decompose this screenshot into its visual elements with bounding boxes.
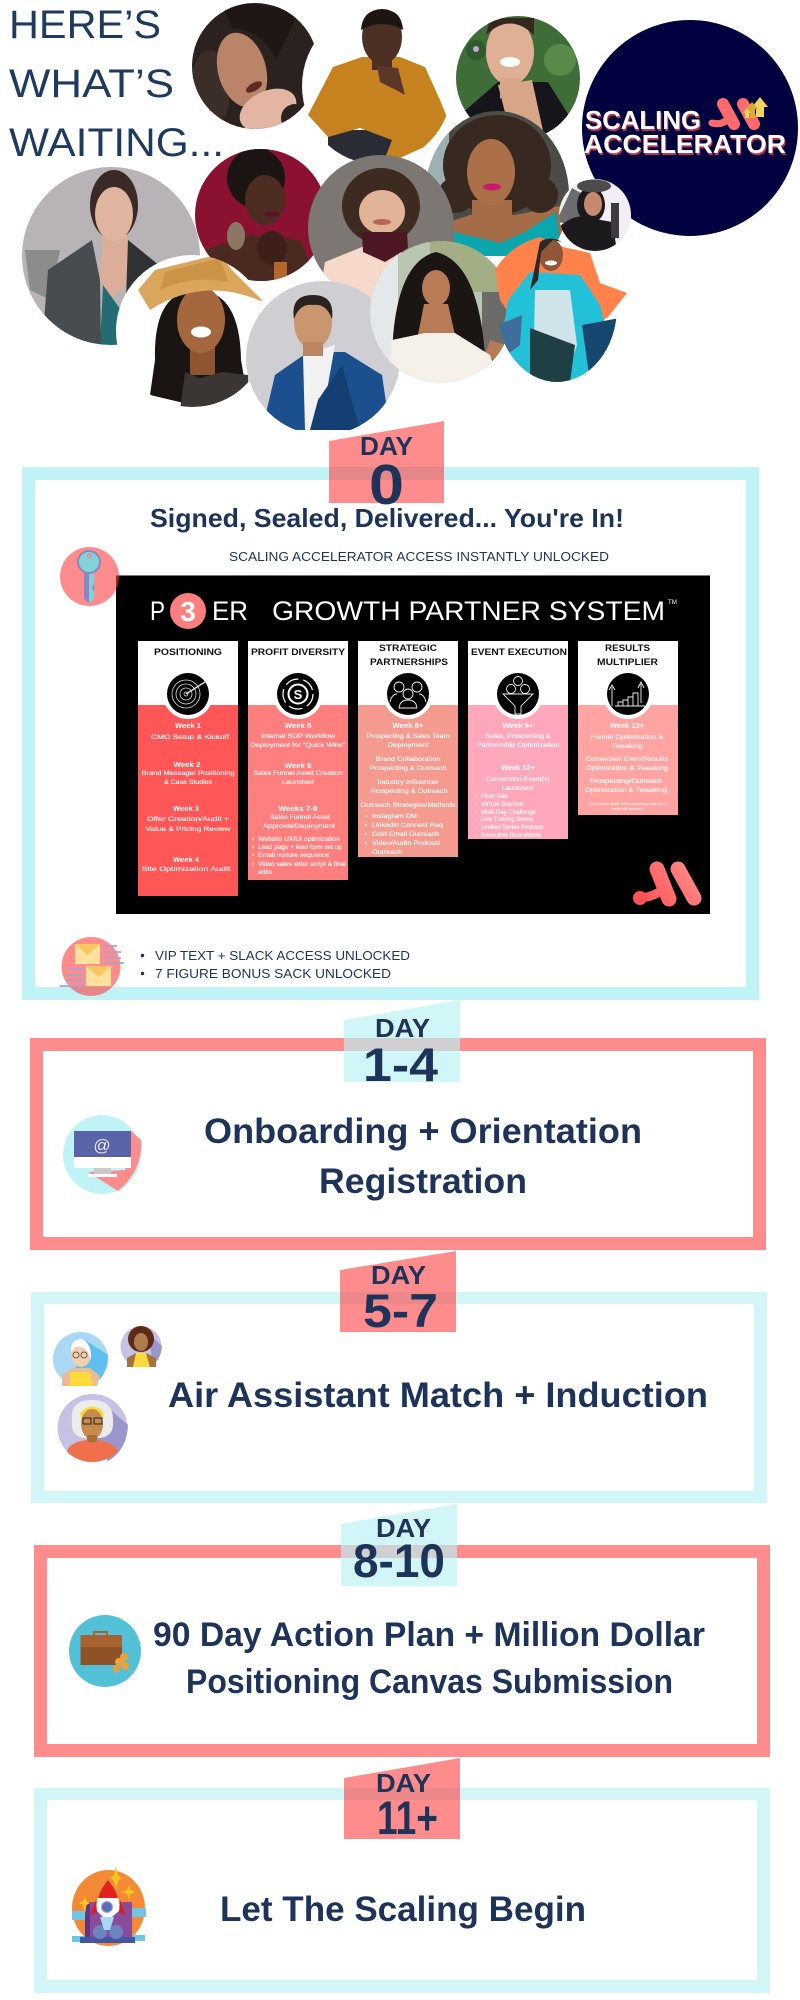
column: event execution: Week 9+: [502, 723, 534, 730]
column: event execution: Sales, Prospecting &: [486, 733, 551, 740]
column: event execution: Executive Roundtable: [481, 832, 542, 839]
column: results multiplier: RESULTS: [605, 642, 650, 653]
column: results multiplier: *we provide daily team reporting and meet: [588, 802, 666, 806]
column: event execution: Flash Sale: [481, 793, 509, 800]
portrait: woman in white top: [370, 240, 515, 385]
system heading: P: [150, 596, 165, 626]
icon: funnel: [497, 673, 539, 715]
logo badge: scaling accelerator: SCALING: [586, 107, 702, 137]
day badge: 0: DAY: [360, 431, 413, 461]
logo badge: scaling accelerator: SCALING: [585, 105, 701, 135]
column: strategic partnerships: Prospecting & Outreach: [370, 765, 447, 772]
column: profit diversity: Internal SOP Workflow: [261, 733, 335, 740]
day badge: 8-10: [341, 1504, 457, 1587]
column: profit diversity: edits: [258, 869, 272, 876]
column: profit diversity: [248, 641, 348, 880]
portrait: man in blue suit: [245, 280, 405, 430]
title: here's what's waiting: WAITING...: [9, 121, 224, 165]
day badge: 5-7: 5-7: [363, 1284, 438, 1337]
heading: let the scaling begin: Let The Scaling Begin: [220, 1890, 586, 1929]
column: event execution: Week 12+: [501, 765, 535, 772]
panel frame: [22, 467, 759, 1000]
column: strategic partnerships: Deployment: [388, 742, 429, 749]
heading: onboarding: Onboarding + Orientation: [204, 1112, 642, 1151]
bullet list: unlocked items: 7 FIGURE BONUS SACK UNLOCKED: [155, 967, 391, 981]
icon: dollar cycle: S: [294, 687, 303, 702]
icon: dollar cycle: [277, 673, 319, 715]
portrait: man in mustard sweater: [302, 9, 446, 160]
column: strategic partnerships: Linkedin Connect Req: [372, 822, 444, 829]
title: here's what's waiting: WHAT’S: [9, 62, 174, 106]
column: strategic partnerships: Prospecting & Outreach: [370, 788, 448, 795]
column: strategic partnerships: Prospecting & Sales Team: [366, 733, 450, 740]
column: results multiplier: Funnel Optimization &: [590, 734, 664, 741]
icon: computer email: [63, 1115, 141, 1194]
heading: registration: Registration: [319, 1162, 527, 1201]
column: results multiplier: Optimization & Tweaking: [586, 765, 668, 772]
icon: people: [387, 673, 429, 715]
portrait: woman in tan hat: [116, 255, 262, 407]
column: strategic partnerships: Brand Collaboration: [376, 756, 441, 763]
day badge: 5-7: [340, 1251, 456, 1337]
icon: M mark: [633, 869, 694, 905]
column: profit diversity: Website UX/UI optimization: [258, 836, 341, 843]
column: strategic partnerships: Outreach Strategies/Methods:: [360, 802, 458, 809]
column: profit diversity: PROFIT DIVERSITY: [251, 646, 346, 657]
column: strategic partnerships: Industry Influencer: [378, 779, 439, 786]
system heading: TM: [668, 600, 677, 606]
column: results multiplier: MULTIPLIER: [597, 656, 658, 667]
day badge: 11+: DAY: [376, 1768, 431, 1798]
column: strategic partnerships: Video/Audio Podcast: [372, 840, 440, 847]
column: positioning: Offer Creation/Audit +: [147, 816, 229, 823]
column: event execution: Conversion Event(s): [486, 776, 550, 783]
portrait: woman with curly hair and teal dress: [425, 110, 570, 256]
column: positioning: [138, 641, 238, 896]
heading: action plan line 2: Positioning Canvas Submission: [186, 1663, 673, 1701]
column: results multiplier: Tweaking: [612, 743, 643, 750]
icon: target: [167, 673, 209, 715]
column: positioning: Site Optimization Audit: [142, 866, 231, 873]
portrait: woman in pink jacket: [308, 155, 454, 298]
day badge: 0: 0: [369, 453, 404, 517]
icon: growth bars: [607, 673, 649, 715]
portrait: woman on red backdrop: [195, 149, 321, 281]
column: positioning: POSITIONING: [154, 646, 222, 657]
column: results multiplier: Conversion Event/Results: [586, 756, 669, 763]
day badge: 1-4: 1-4: [363, 1038, 438, 1091]
column: strategic partnerships: Instagram DM: [372, 813, 417, 820]
column: positioning: CMO Setup & Kickoff: [151, 734, 229, 741]
column: event execution: Live Training Series: [481, 816, 533, 823]
panel: day 8-10: [34, 1545, 770, 1757]
portrait: woman with curly hair, eyes closed: [192, 3, 314, 129]
icon: M logo with arrows: [712, 97, 768, 124]
logo badge: scaling accelerator: [582, 20, 798, 236]
column: profit diversity: Sales Funnel Asset: [270, 814, 330, 821]
day badge: 8-10: 8-10: [353, 1534, 445, 1587]
column: results multiplier: Week 13+: [610, 723, 644, 730]
column: strategic partnerships: [358, 641, 458, 857]
icon: rocket launching from laptop: [72, 1866, 146, 1946]
system heading: 3: [180, 596, 196, 627]
column: profit diversity: Email nurture sequence: [258, 852, 330, 859]
portrait: small woman in black: [559, 179, 631, 251]
column: profit diversity: Week 6: [284, 763, 312, 770]
portrait: woman over orange africa map: [495, 237, 627, 382]
column: strategic partnerships: Outreach: [372, 849, 403, 856]
icon: computer email: @: [93, 1136, 111, 1155]
day badge: 11+: [344, 1758, 460, 1844]
day badge: 8-10: DAY: [376, 1513, 431, 1543]
day badge: 1-4: [344, 1000, 460, 1091]
system heading: GROWTH PARTNER SYSTEM: [272, 596, 665, 626]
icon: mail envelopes: [60, 937, 124, 996]
portrait: woman on green wall: [456, 16, 580, 134]
column: positioning: Week 1: [175, 723, 201, 730]
bullet list: unlocked items: VIP TEXT + SLACK ACCESS UNLOCKED: [155, 949, 410, 963]
column: event execution: Limited Series Podcast: [481, 824, 543, 831]
column: results multiplier: [578, 641, 678, 815]
system heading: ER: [212, 596, 248, 626]
column: event execution: EVENT EXECUTION: [471, 646, 567, 657]
column: positioning: Week 4: [173, 857, 199, 864]
day badge: 5-7: DAY: [371, 1260, 426, 1290]
column: positioning: Week 2: [174, 762, 201, 769]
column: profit diversity: Week 5: [284, 723, 312, 730]
panel: day 5-7: [31, 1292, 767, 1503]
system heading: [150, 593, 677, 629]
column: strategic partnerships: STRATEGIC: [379, 642, 437, 653]
column: event execution: Launched:: [502, 785, 535, 792]
logo badge: scaling accelerator: ACCELERATOR: [585, 131, 787, 161]
portrait: woman in leather jacket: [20, 165, 205, 347]
column: profit diversity: Video sales letter script & final: [258, 861, 346, 868]
heading: signed sealed delivered: Signed, Sealed, Delivered... You're In!: [150, 503, 624, 533]
column: results multiplier: Optimization & Tweaking: [585, 787, 667, 794]
day badge: 1-4: DAY: [375, 1013, 430, 1043]
panel: day 0: [22, 421, 770, 1993]
column: profit diversity: Lead page + lead form set up: [258, 844, 343, 851]
panel: day 1-4: [30, 1038, 766, 1250]
column: event execution: [468, 641, 568, 839]
column: positioning: & Case Studies: [164, 779, 213, 786]
column: profit diversity: Approval/Deployment: [263, 823, 335, 830]
column: strategic partnerships: Cold Email Outreach: [372, 831, 440, 838]
heading: action plan line 1: 90 Day Action Plan + Million Dollar: [153, 1616, 705, 1654]
day badge: 11+: 11+: [377, 1791, 438, 1844]
column: profit diversity: Launched: [282, 779, 314, 786]
title: here's what's waiting: HERE’S: [9, 3, 161, 47]
column: results multiplier: weekly with executives: [611, 807, 643, 811]
bullet list: unlocked items: [141, 949, 410, 981]
heading: air assistant: Air Assistant Match + Induction: [168, 1376, 708, 1415]
column: profit diversity: Sales Funnel Asset Creation: [254, 770, 343, 777]
column: profit diversity: Weeks 7-8: [278, 806, 318, 813]
day badge: 0: [329, 421, 444, 517]
title: here's what's waiting: [9, 3, 224, 165]
icon: key: [60, 547, 119, 606]
icon: assistant avatars: [53, 1326, 162, 1462]
column: results multiplier: Prospecting/Outreach: [590, 778, 662, 785]
subheading: access unlocked: SCALING ACCELERATOR ACCESS INSTANTLY UNLOCKED: [229, 549, 609, 564]
column: event execution: Multi-Day Challenge: [481, 809, 537, 816]
column: strategic partnerships: PARTNERSHIPS: [370, 656, 448, 667]
icon: briefcase: [69, 1615, 141, 1687]
column: event execution: Partnership Optimization: [476, 742, 560, 749]
column: positioning: Brand Message/ Positioning: [142, 770, 235, 777]
column: positioning: Value & Pricing Review: [146, 826, 231, 833]
logo badge: scaling accelerator: ACCELERATOR: [584, 129, 786, 159]
column: event execution: Virtual Summit: [481, 801, 523, 808]
diagram: power growth partner system: [116, 575, 710, 914]
panel: day 11+: [34, 1788, 770, 1993]
column: profit diversity: Deployment for "Quick Wins": [250, 742, 346, 749]
column: positioning: Week 3: [173, 806, 199, 813]
column: strategic partnerships: Week 8+: [392, 723, 424, 730]
